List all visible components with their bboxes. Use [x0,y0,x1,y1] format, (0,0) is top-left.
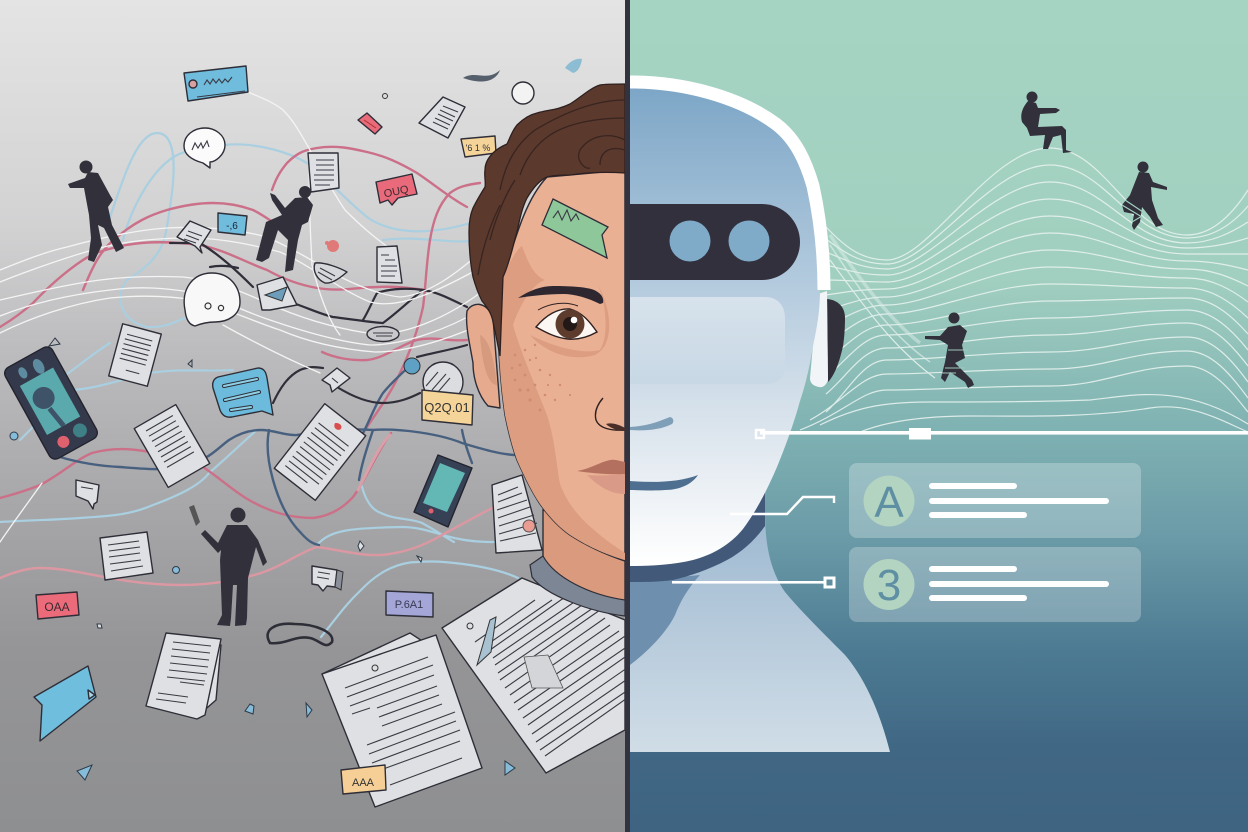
robot nose [630,417,673,430]
card: 3: 3 [877,561,901,610]
red bubble: OUQ [383,183,410,200]
human head [467,84,625,616]
figure: person with long hair [256,186,313,272]
collar [530,556,625,616]
figure: pushing on wave [925,312,974,388]
small bubble [76,480,99,509]
hair strands [478,100,625,275]
figures on left [68,160,313,626]
figure: striding on wave [1122,162,1167,230]
page with red mark [274,404,366,500]
floating papers and notes [2,59,630,807]
robot eyes [670,220,770,262]
page tilted with lines [134,405,210,487]
robot body [630,510,890,752]
face shadow [499,246,625,560]
figure: seated on wave [1021,92,1072,153]
sticky yellow note: AAA [352,777,375,789]
eye [536,303,597,339]
speech bubble top [184,128,225,168]
freckles [511,344,571,411]
figure: walking man [68,160,124,262]
yellow tag top: '6 1 % [466,143,490,153]
page lower left [100,532,153,580]
face skin [499,170,625,561]
small icons top right [382,59,582,104]
oval note [367,326,399,342]
circuit line lower [672,578,834,587]
left panel: chaotic human side [0,0,630,832]
robot visor [630,204,800,280]
document bottom left [146,633,221,719]
circuit line top [756,428,1248,440]
red bubble [376,174,417,205]
robot ear cup [827,299,845,382]
circuit line middle [730,497,834,514]
red tag [36,592,79,619]
blue card top [184,66,248,101]
large white speech bubble [184,273,240,326]
yellow label [422,390,473,425]
card: 3 [849,547,1141,622]
robot head [630,82,820,566]
page top right [419,97,465,138]
pink blob [325,240,339,252]
robot collar [630,490,765,582]
shirt paper [442,578,630,773]
center divider [625,0,630,832]
green forehead tag [542,199,608,258]
page top middle [308,153,339,192]
figure: man in suit with tool [189,505,267,626]
purple tag [386,591,433,617]
right panel: AI side [630,0,1248,832]
tangled wires [0,92,522,637]
sticky yellow note [341,765,386,794]
small phone [414,455,472,527]
nose [595,398,625,430]
yellow tag top [461,136,496,157]
small red tag [358,113,382,134]
ear [467,304,500,408]
neck [543,510,625,601]
blue speech bubble with lines [213,368,273,417]
card: A [849,463,1141,538]
wave lines [800,148,1248,432]
page by curve right [377,246,402,283]
small page by figure [177,221,211,253]
page left [109,324,161,386]
robot ear band [810,291,828,387]
page by face [492,475,542,553]
purple tag: P.6A1 [395,599,423,611]
eyebrow [518,286,603,304]
hair [469,84,625,356]
robot mouth [630,475,698,490]
white head rim [630,82,824,290]
card: A: A [874,478,904,527]
large phone [2,344,100,462]
robot face plate [630,297,785,384]
blue folded flag [34,666,96,741]
small paper near wire [322,368,350,392]
small note [312,566,343,591]
lips [577,460,625,474]
red tag: OAA [44,600,70,614]
blue square note: -,6 [226,221,238,232]
crumpled papers [257,263,347,310]
page stack big [322,633,482,807]
blue square note [218,213,247,235]
yellow label: Q2Q.01 [424,400,470,415]
confetti shapes [10,338,515,780]
curved headset [268,624,332,645]
eye shadow [530,285,609,357]
round badge near ear [404,358,464,393]
